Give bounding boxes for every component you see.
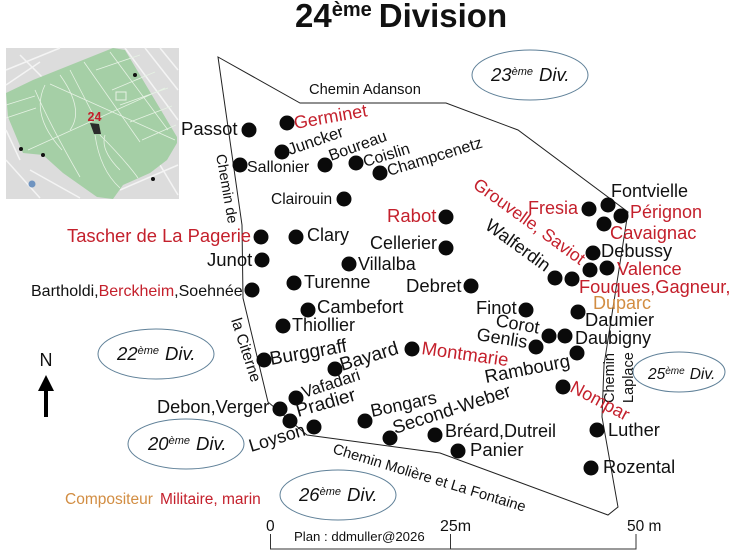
- north arrow: N: [40, 350, 52, 370]
- legend: Compositeur: [65, 491, 153, 508]
- grave names, upper left: Coislin: [361, 141, 412, 171]
- grave names, upper left: Clairouin: [271, 191, 332, 208]
- grave names, right side: Fontvielle: [611, 181, 688, 201]
- path labels: Chemin Adanson: [309, 82, 421, 98]
- locator map of the cemetery: [6, 48, 179, 199]
- division labels: 20: [148, 433, 169, 454]
- division labels: Div.: [165, 343, 195, 364]
- grave names, upper left: Turenne: [304, 272, 370, 292]
- grave names, right side: Daubigny: [575, 328, 651, 348]
- grave names, upper left: Rabot: [387, 205, 436, 226]
- grave names, right side: [470, 174, 730, 477]
- grave names, upper left: Passot: [181, 118, 238, 139]
- grave names, right side: Luther: [608, 419, 660, 440]
- legend: [65, 491, 261, 508]
- grave names, upper left: Junot: [207, 249, 252, 270]
- path labels: Laplace: [621, 352, 637, 403]
- grave names, upper left: Juncker: [285, 123, 346, 159]
- grave names, right side: Rambourg: [483, 350, 572, 387]
- grave names, lower left: Burggraff: [268, 336, 349, 370]
- grave names, upper left: Bartholdi,Berckheim,Soehnée: [31, 283, 243, 300]
- grave markers: [232, 116, 628, 476]
- division labels: ème: [169, 435, 190, 447]
- division labels: [116, 64, 715, 505]
- grave names, lower left: Montmarie: [420, 337, 510, 370]
- grave names, upper left: Sallonier: [247, 159, 310, 176]
- neighbouring division ellipses: [98, 50, 725, 520]
- grave names, upper left: [31, 100, 485, 335]
- division labels: ème: [665, 366, 685, 377]
- grave names, lower left: Second-Weber: [390, 380, 513, 438]
- legend: Militaire, marin: [160, 491, 261, 508]
- grave names, lower left: Bréard,Dutreil: [445, 421, 556, 441]
- grave names, lower left: Bongars: [369, 387, 438, 421]
- division labels: 26: [299, 484, 320, 505]
- grave names, upper left: Debret: [406, 275, 462, 296]
- division labels: ème: [320, 486, 341, 498]
- grave names, right side: Fresia: [528, 198, 579, 218]
- grave names, lower left: Panier: [470, 439, 523, 460]
- grave names, lower left: Debon,Verger: [157, 397, 269, 417]
- path labels: la Citerne: [227, 316, 264, 384]
- division labels: Div.: [347, 484, 377, 505]
- grave names, right side: Fouques,Gagneur,: [579, 276, 730, 297]
- division labels: 23: [491, 64, 512, 85]
- division labels: ème: [512, 66, 533, 78]
- grave names, right side: Grouvelle, Saviot: [470, 174, 589, 269]
- grave names, right side: Debussy: [601, 240, 673, 261]
- grave names, upper left: Cambefort: [317, 296, 403, 317]
- scale bar: 50 m: [627, 518, 661, 535]
- grave names, right side: Corot: [494, 310, 541, 338]
- division labels: 22: [117, 343, 138, 364]
- grave names, right side: Rozental: [603, 456, 675, 477]
- grave names, upper left: Villalba: [358, 254, 417, 274]
- grave names, upper left: Germinet: [292, 100, 369, 133]
- grave names, lower left: Bayard: [337, 338, 401, 376]
- grave names, upper left: Champcenetz: [385, 135, 485, 180]
- grave names, lower left: Loyson: [246, 420, 308, 456]
- grave names, right side: Cavaignac: [610, 222, 696, 243]
- path labels: Chemin Molière et La Fontaine: [331, 442, 528, 516]
- path labels: Chemin de: [212, 153, 240, 225]
- grave names, lower left: Vafadari: [300, 366, 363, 402]
- grave names, right side: Duparc: [593, 293, 651, 313]
- north arrow: [38, 350, 54, 417]
- grave names, upper left: Thiollier: [292, 315, 355, 335]
- grave names, lower left: Pradier: [294, 385, 359, 422]
- division labels: Div.: [539, 64, 569, 85]
- grave names, right side: Walferdin: [482, 215, 554, 276]
- grave names, upper left: Clary: [307, 225, 349, 245]
- division labels: 25: [648, 366, 665, 383]
- grave names, upper left: Tascher de La Pagerie: [67, 225, 251, 246]
- grave names, right side: Valence: [617, 258, 682, 279]
- path labels: Chemin: [602, 353, 618, 403]
- grave names, lower left: [157, 336, 556, 460]
- division labels: ème: [138, 345, 159, 357]
- grave names, right side: Finot: [476, 297, 517, 318]
- grave names, right side: Daumier: [585, 309, 654, 330]
- division labels: Div.: [690, 366, 715, 383]
- scale bar: 0: [266, 518, 275, 535]
- grave names, right side: Nompar: [567, 377, 633, 425]
- locator map of the cemetery: 24: [88, 110, 101, 124]
- grave names, right side: Pérignon: [630, 202, 702, 222]
- grave names, upper left: Cellerier: [370, 233, 437, 253]
- division labels: Div.: [196, 433, 226, 454]
- scale bar: Plan : ddmuller@2026: [294, 529, 425, 544]
- scale bar: [266, 518, 661, 549]
- grave names, upper left: Boureau: [327, 128, 389, 165]
- grave names, right side: Genlis: [475, 324, 529, 352]
- scale bar: 25m: [440, 518, 471, 535]
- plot outline of the division: [218, 57, 628, 515]
- path labels: [212, 82, 637, 516]
